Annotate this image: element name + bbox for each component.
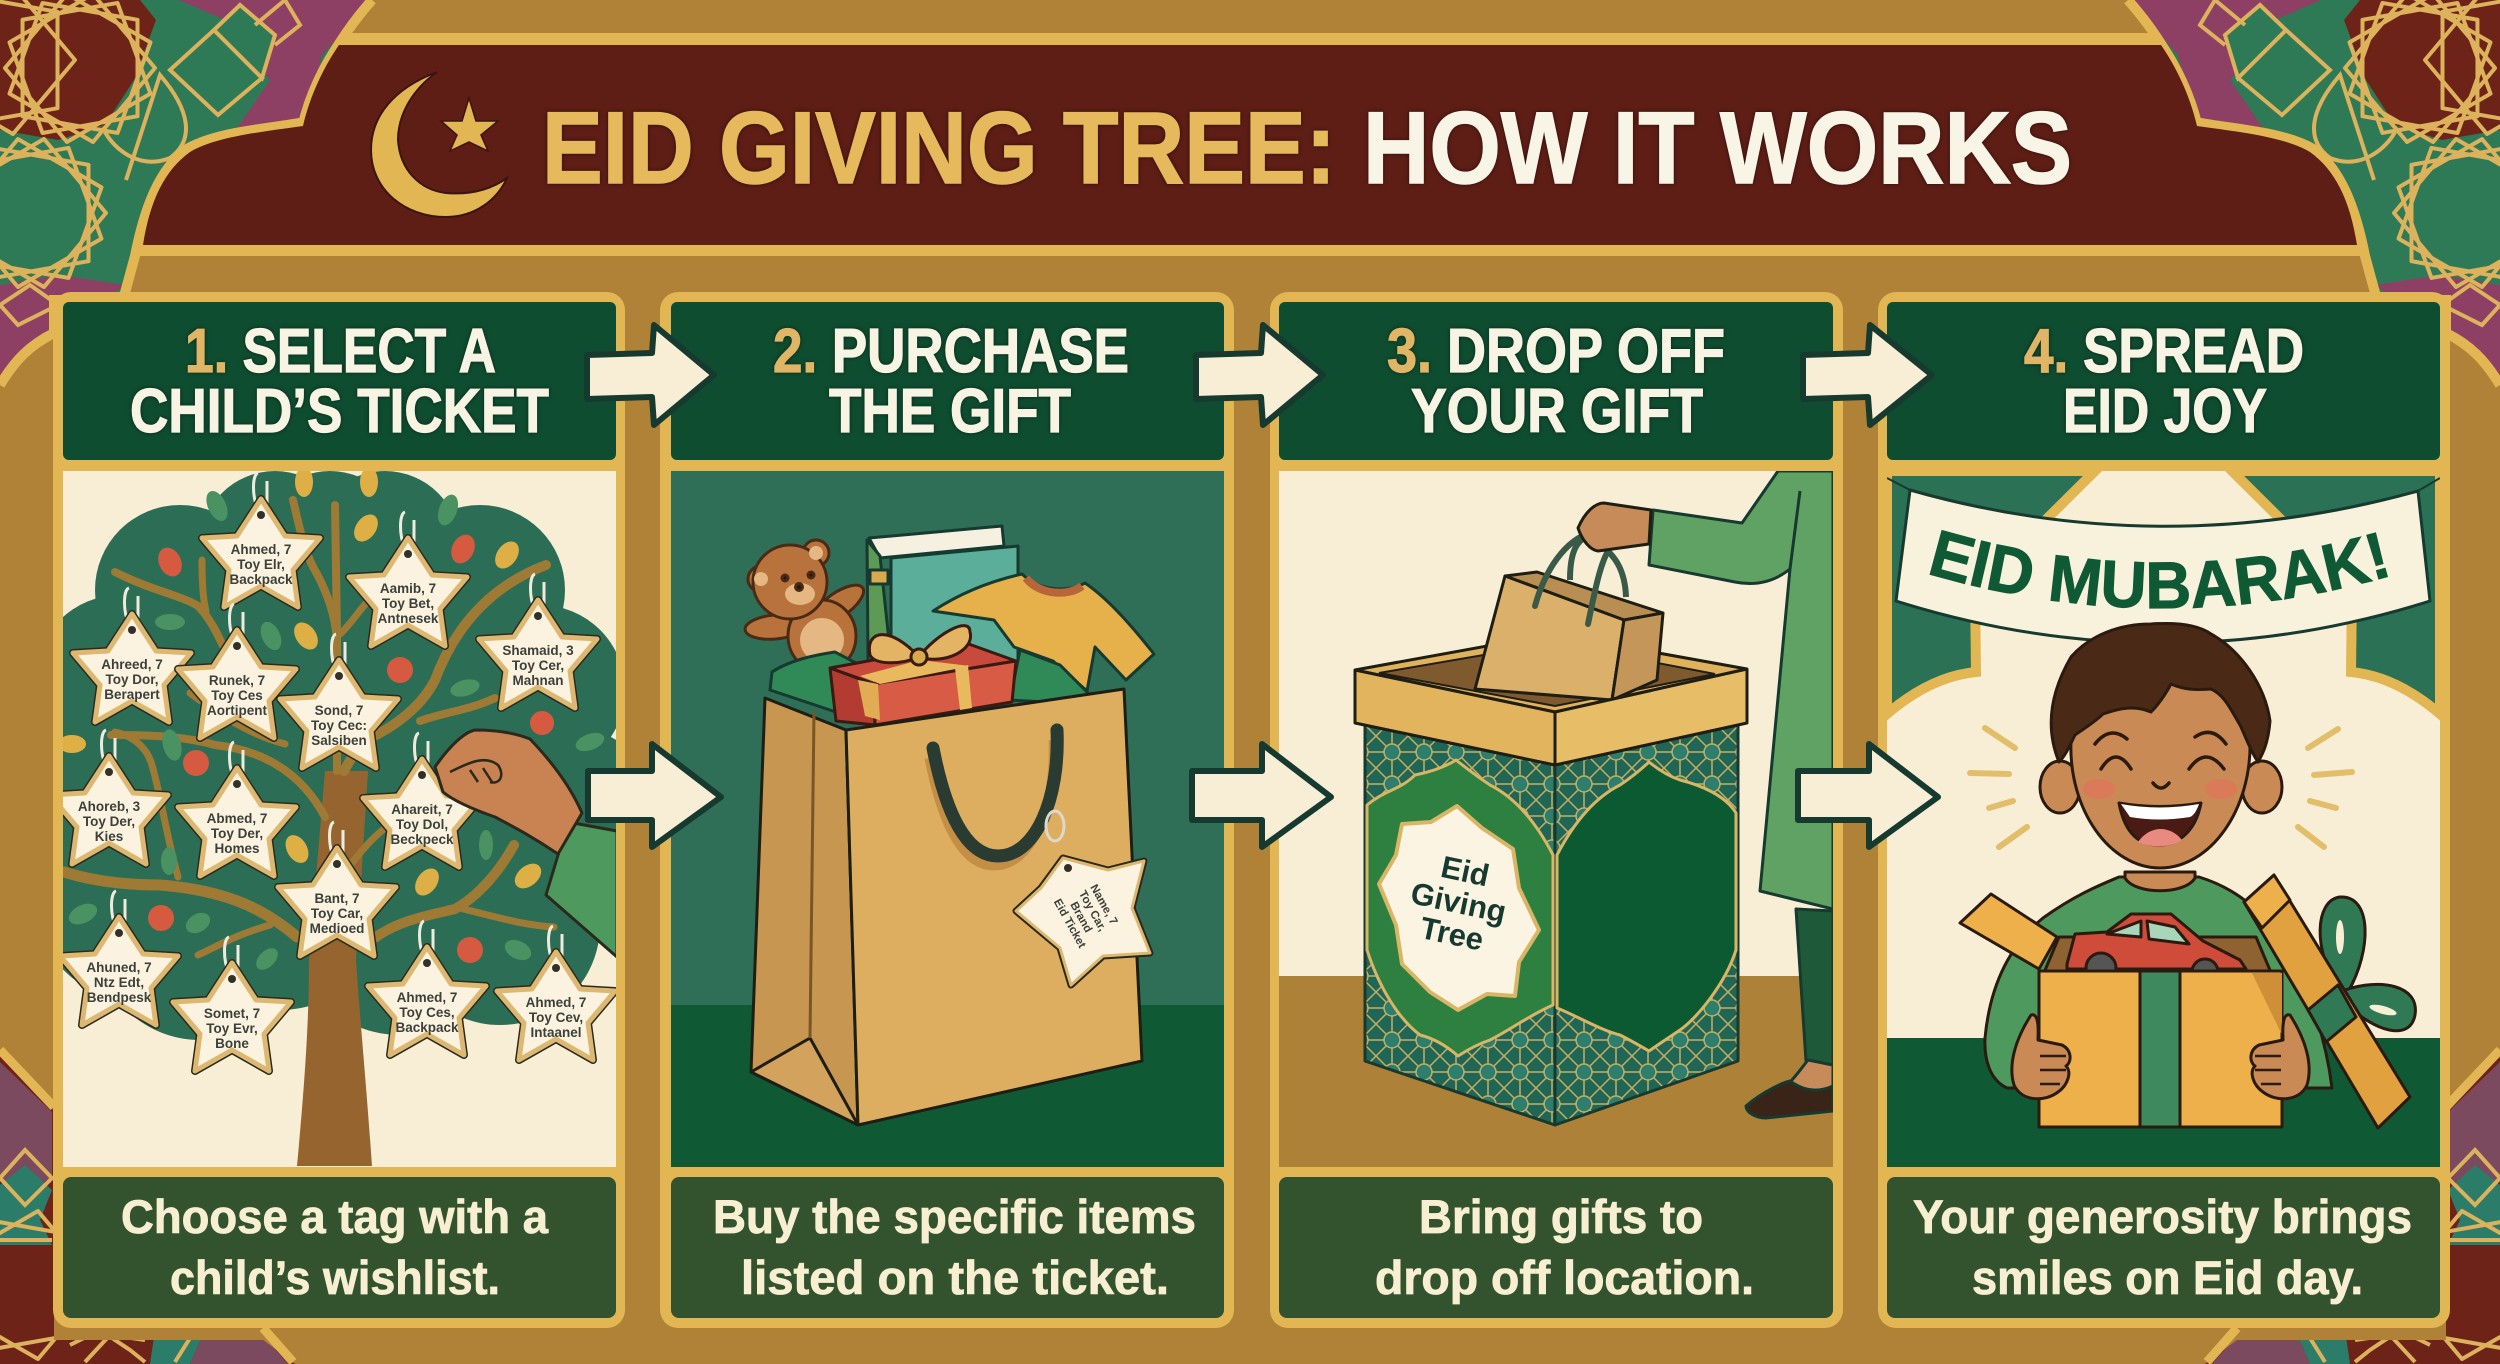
teddy bear [744, 538, 866, 660]
panel 4 caption: Your generosity brings [1913, 1190, 2412, 1243]
banner: EID MUBARAK! [1930, 530, 2388, 609]
box lid [1355, 669, 1747, 765]
star tag: Bant, 7: Medioed [310, 921, 364, 936]
panel 2 caption: Buy the specific items [713, 1190, 1196, 1243]
hanging star tag [1016, 811, 1150, 985]
panel 3 caption: Bring gifts to [1419, 1190, 1703, 1243]
carried bag [1475, 503, 1663, 700]
star tag: Ahmed, 7 (right): Ahmed, 7 [526, 995, 586, 1010]
star tag: Aamib, 7: Toy Bet, [382, 596, 434, 611]
star tag: Bant, 7 [278, 822, 396, 956]
star tag: Runek, 7: Runek, 7 [209, 673, 265, 688]
star tag: Aamib, 7: Antnesek [378, 611, 439, 626]
star tag: Somet, 7 [173, 937, 291, 1071]
star tag: Shamaid, 3: Toy Cer, [512, 658, 564, 673]
panel 3 heading [1279, 302, 1833, 460]
box label: Tree [1417, 910, 1487, 958]
star tag: Ahmed, 7 [202, 473, 320, 607]
gift box [830, 626, 1016, 725]
box label: Giving [1408, 875, 1509, 930]
star tag: Somet, 7: Toy Evr, [206, 1021, 258, 1036]
star tag: Ahuned, 7 [60, 891, 178, 1025]
star tag: Ahreed, 7: Toy Dor, [105, 672, 159, 687]
arrow: bottom 3 to 4 [1798, 744, 1938, 847]
hand picking a tag [435, 730, 617, 957]
star tag: Ahoreb, 3: Ahoreb, 3 [78, 799, 141, 814]
star tag: Ahmed, 7 (lower) [368, 921, 486, 1055]
panel 1 caption: Choose a tag with a [121, 1190, 549, 1243]
panel 1 caption [63, 1177, 616, 1318]
cloth [768, 650, 1090, 713]
star tag: Ahmed, 7 (right) [497, 926, 615, 1060]
arch backdrop [1887, 471, 2440, 714]
panel 3 illustration: drop box [1279, 471, 1833, 1167]
star tag: Bant, 7: Bant, 7 [314, 891, 360, 906]
title: HOW IT WORKS [1363, 91, 2072, 205]
star tag: Ahareit, 7: Ahareit, 7 [391, 802, 453, 817]
star tag: Abmed, 7: Toy Der, [211, 826, 263, 841]
panel 2 caption [671, 1177, 1224, 1318]
panel 4 caption [1887, 1177, 2440, 1318]
box interior [1354, 644, 1747, 710]
star tag: Aamib, 7 [349, 512, 467, 646]
star tag: Ahoreb, 3: Toy Der, [83, 814, 135, 829]
panel 4 caption: smiles on Eid day. [1972, 1251, 2363, 1304]
star tag: Ahareit, 7 [363, 733, 481, 867]
tree trunk and branches [64, 500, 554, 1166]
panel 1 heading [63, 302, 616, 460]
panel 1 heading: 1. SELECT A [185, 317, 496, 386]
star tag: Ahuned, 7: Ahuned, 7 [86, 960, 152, 975]
star tag: Somet, 7: Bone [215, 1036, 249, 1051]
star tag: Runek, 7: Aortipent [207, 703, 267, 718]
star tag: Sond, 7 [280, 634, 398, 768]
star tag: Abmed, 7 [178, 742, 296, 876]
star tag: Ahmed, 7 (right): Intaanel [530, 1025, 582, 1040]
star tag: Ahreed, 7 [73, 588, 191, 722]
box label [1379, 806, 1539, 1010]
hanging star tag: Eid Ticket [1051, 897, 1088, 950]
open gift box with toy car [1960, 875, 2415, 1128]
book [867, 526, 1018, 670]
star tag: Ahmed, 7 (lower): Backpack [395, 1020, 459, 1035]
shirt [933, 574, 1154, 691]
arrow: bottom 1 to 2 [588, 744, 721, 847]
panel 1: select a child's ticket [53, 292, 625, 1328]
star tag: Runek, 7 [178, 604, 296, 738]
panel 3 caption: drop off location. [1375, 1251, 1754, 1304]
title: EID GIVING TREE: [542, 91, 1336, 205]
star tag: Shamaid, 3: Shamaid, 3 [502, 643, 574, 658]
tree canopy [63, 471, 616, 1040]
title [542, 91, 2072, 205]
panel 1 illustration: giving tree with star tags [63, 471, 616, 1167]
star tag: Ahuned, 7: Ntz Edt, [94, 975, 144, 990]
corner ornament: top right [2128, 0, 2500, 385]
panel 1 caption: child’s wishlist. [170, 1251, 500, 1304]
star tag: Ahmed, 7: Toy Elr, [237, 557, 285, 572]
panel 2 heading: 2. PURCHASE [773, 317, 1129, 386]
header banner [136, 45, 2364, 256]
arrow: top 2 to 3 [1196, 325, 1323, 425]
star tag: Ahmed, 7 (lower): Ahmed, 7 [397, 990, 457, 1005]
star tag: Ahmed, 7 (right): Toy Cev, [529, 1010, 583, 1025]
panel 1 heading: CHILD’S TICKET [130, 377, 549, 446]
star tag: Ahoreb, 3 [50, 730, 168, 864]
corner ornament: bottom right [2205, 1050, 2500, 1364]
star tag: Ahareit, 7: Toy Dol, [396, 817, 448, 832]
star tag: Sond, 7: Toy Cec: [311, 718, 367, 733]
arrow: bottom 2 to 3 [1192, 744, 1331, 847]
joy rays [1970, 728, 2352, 847]
arrow: top 3 to 4 [1803, 325, 1932, 425]
hanging star tag: Name, 7 [1087, 883, 1119, 927]
child [1985, 623, 2332, 1088]
banner [1887, 477, 2440, 642]
star tag: Ahmed, 7 (lower): Toy Ces, [399, 1005, 455, 1020]
panel 3: drop off your gift [1270, 292, 1843, 1328]
star tag: Ahoreb, 3: Kies [95, 829, 123, 844]
star tag: Aamib, 7: Aamib, 7 [380, 581, 436, 596]
panel 4: spread Eid joy [1878, 292, 2450, 1328]
hanging star tag: Brand [1067, 900, 1094, 935]
box body [1365, 725, 1738, 1125]
panel 2 caption: listed on the ticket. [741, 1251, 1169, 1304]
panel 4 heading: 4. SPREAD [2024, 317, 2304, 386]
star tag: Sond, 7: Sond, 7 [315, 703, 363, 718]
star tag: Abmed, 7: Homes [214, 841, 260, 856]
star tag: Ahareit, 7: Beckpeck [390, 832, 454, 847]
corner ornament: bottom left [0, 1050, 295, 1364]
star tag: Shamaid, 3: Mahnan [512, 673, 564, 688]
star tag: Sond, 7: Salsiben [311, 733, 367, 748]
panel 3 caption [1279, 1177, 1833, 1318]
panel 2 heading: THE GIFT [829, 377, 1071, 446]
arrow: top 1 to 2 [587, 325, 714, 425]
panel 4 illustration: happy child with gift [1887, 471, 2440, 1167]
panel 4 heading: EID JOY [2063, 377, 2267, 446]
box label: Eid [1438, 849, 1492, 893]
panel 3 heading: 3. DROP OFF [1387, 317, 1725, 386]
star tag: Ahreed, 7: Ahreed, 7 [101, 657, 163, 672]
icon: crescent and star [371, 72, 507, 217]
panel 4 heading [1887, 302, 2440, 460]
star tag: Bant, 7: Toy Car, [311, 906, 363, 921]
star tag: Shamaid, 3 [479, 574, 597, 708]
leaves and apples [58, 467, 607, 974]
bag [751, 689, 1142, 1125]
panel 3 heading: YOUR GIFT [1411, 377, 1703, 446]
star tag: Somet, 7: Somet, 7 [204, 1006, 260, 1021]
panel 2 illustration: gift bag [671, 471, 1224, 1167]
star tag: Ahuned, 7: Bendpesk [87, 990, 152, 1005]
star tag: Ahreed, 7: Berapert [104, 687, 160, 702]
star tag: Abmed, 7: Abmed, 7 [207, 811, 267, 826]
star tag: Runek, 7: Toy Ces [211, 688, 263, 703]
star tag: Ahmed, 7: Backpack [229, 572, 293, 587]
star tag: Ahmed, 7: Ahmed, 7 [231, 542, 291, 557]
corner ornament: top left [0, 0, 372, 385]
panel 2: purchase the gift [660, 292, 1234, 1328]
hanging star tag: Toy Car, [1076, 889, 1108, 934]
panel 2 heading [671, 302, 1224, 460]
person [1649, 471, 1833, 1118]
